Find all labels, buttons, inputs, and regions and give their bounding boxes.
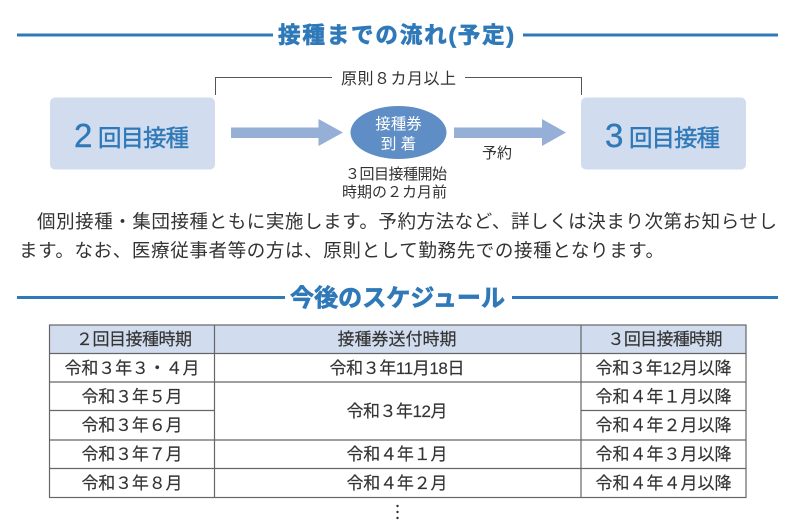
table column 1: [64, 330, 200, 493]
note: two months before third dose: [342, 166, 447, 201]
table: schedule: [50, 325, 746, 498]
box: second dose: 2: [74, 117, 92, 154]
arrow: voucher to third dose: [454, 119, 566, 146]
ellipse: voucher arrival: 到 着: [381, 135, 416, 153]
table column 3: 令和４年２月以降: [596, 416, 732, 435]
table column 2: 令和４年１月: [346, 445, 448, 464]
box: second dose: 回目接種: [98, 125, 189, 151]
note: two months before third dose: 時期の２カ月前: [342, 184, 447, 201]
table column 1: 令和３年７月: [82, 445, 182, 464]
box: third dose: 回目接種: [629, 125, 720, 151]
body text: 個別接種・集団接種ともに実施します。予約方法など、詳しくは決まり次第お知らせし: [37, 211, 777, 232]
box: third dose: 3: [605, 117, 623, 154]
table column 1: 令和３年８月: [82, 474, 182, 493]
ellipse: voucher arrival: 接種券: [375, 115, 422, 133]
table column 2: 令和３年12月: [346, 402, 448, 421]
table column 3: ３回目接種時期: [608, 330, 722, 349]
table column 2: 令和４年２月: [346, 474, 448, 493]
heading: flow section: [17, 23, 778, 48]
bracket: at least 8 months interval: 原則８カ月以上: [341, 70, 456, 88]
note: two months before third dose: ３回目接種開始: [345, 166, 447, 183]
table column 1: 令和３年５月: [82, 388, 182, 406]
body text: [19, 211, 777, 261]
table column 3: 令和３年12月以降: [596, 359, 732, 378]
table column 3: [596, 330, 732, 493]
ellipse: voucher arrival: [350, 106, 446, 159]
heading: schedule section: [17, 285, 778, 312]
table column 1: 令和３年３・４月: [64, 359, 200, 378]
continuation dots: [396, 505, 399, 519]
label: reservation: 予約: [482, 145, 512, 162]
body text: ます。なお、医療従事者等の方は、原則として勤務先での接種となります。: [19, 240, 664, 261]
heading: flow section: 接種までの流れ(予定): [278, 23, 514, 48]
table column 1: 令和３年６月: [82, 416, 182, 435]
table column 3: 令和４年３月以降: [596, 445, 732, 464]
box: second dose: [50, 98, 215, 170]
table column 3: 令和４年４月以降: [596, 474, 732, 493]
table column 2: [330, 330, 464, 493]
heading: schedule section: 今後のスケジュール: [290, 285, 505, 312]
bracket: at least 8 months interval: [216, 70, 582, 95]
table column 1: ２回目接種時期: [76, 330, 192, 349]
table column 3: 令和４年１月以降: [596, 388, 732, 406]
table column 2: 令和３年11月18日: [330, 359, 464, 378]
table header background: [50, 325, 746, 354]
table column 2: 接種券送付時期: [338, 330, 456, 349]
box: third dose: [581, 98, 746, 170]
arrow: second dose to voucher: [231, 119, 343, 146]
